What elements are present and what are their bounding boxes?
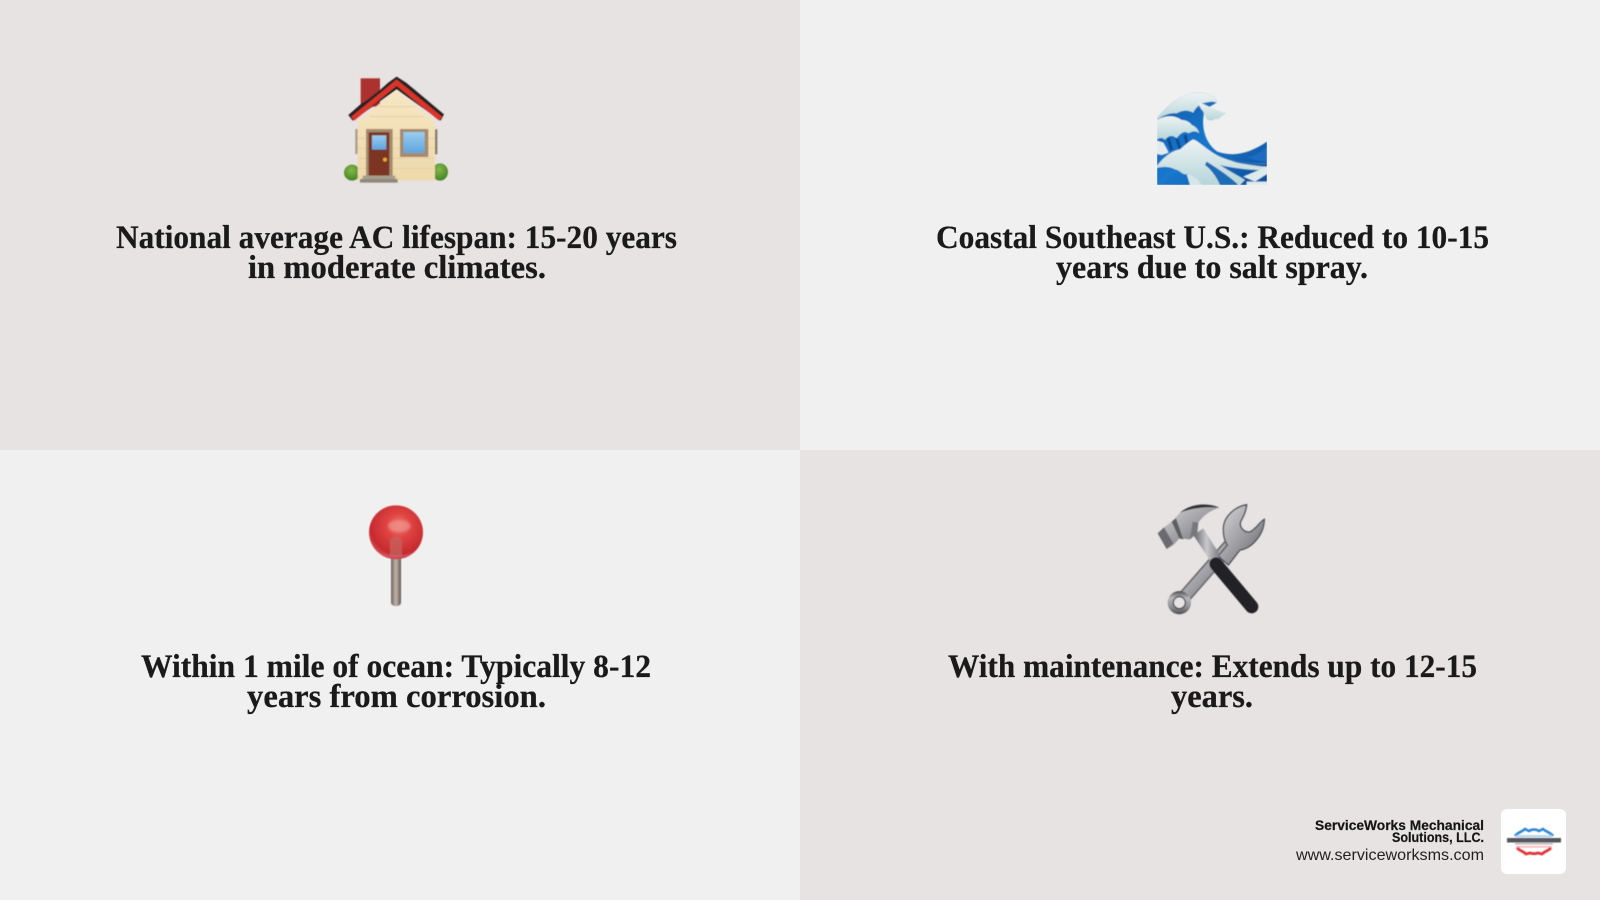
icon: hammer and wrench bbox=[1158, 504, 1264, 614]
panel: coastal southeast bbox=[937, 92, 1488, 286]
heading: with maintenance: years. bbox=[1171, 679, 1253, 715]
company name: ServiceWorks Mechanical bbox=[1315, 818, 1484, 833]
website: www.serviceworksms.com bbox=[1295, 847, 1484, 864]
panel: national average bbox=[0, 0, 800, 450]
heading: within 1 mile of ocean bbox=[141, 649, 651, 715]
heading: within 1 mile of ocean: Within 1 mile of ocean: Typically 8-12 bbox=[141, 649, 651, 685]
heading: coastal southeast: Coastal Southeast U.S.: Reduced to 10-15 bbox=[936, 220, 1489, 256]
panel background bbox=[0, 0, 800, 450]
heading: national average: in moderate climates. bbox=[248, 250, 546, 286]
company name: Solutions, LLC. bbox=[1392, 830, 1484, 845]
panel background bbox=[0, 450, 800, 900]
icon: house bbox=[344, 77, 448, 183]
heading: with maintenance bbox=[948, 649, 1477, 715]
panel background bbox=[800, 450, 1600, 900]
heading: national average: National average AC lifespan: 15-20 years bbox=[116, 220, 677, 256]
company name bbox=[1315, 818, 1484, 845]
icon: great wave bbox=[1157, 93, 1267, 185]
heading: coastal southeast bbox=[936, 220, 1489, 286]
panel: within 1 mile of ocean bbox=[0, 450, 800, 900]
panel background bbox=[800, 0, 1600, 450]
footer: company branding bbox=[1295, 809, 1566, 874]
logo card bbox=[1501, 809, 1566, 874]
heading: coastal southeast: years due to salt spray. bbox=[1056, 250, 1368, 286]
heading: with maintenance: With maintenance: Extends up to 12-15 bbox=[948, 649, 1477, 685]
heading: within 1 mile of ocean: years from corrosion. bbox=[247, 679, 546, 715]
icon: round pin bbox=[369, 505, 423, 606]
heading: national average bbox=[116, 220, 677, 286]
panel: with maintenance bbox=[800, 450, 1600, 900]
